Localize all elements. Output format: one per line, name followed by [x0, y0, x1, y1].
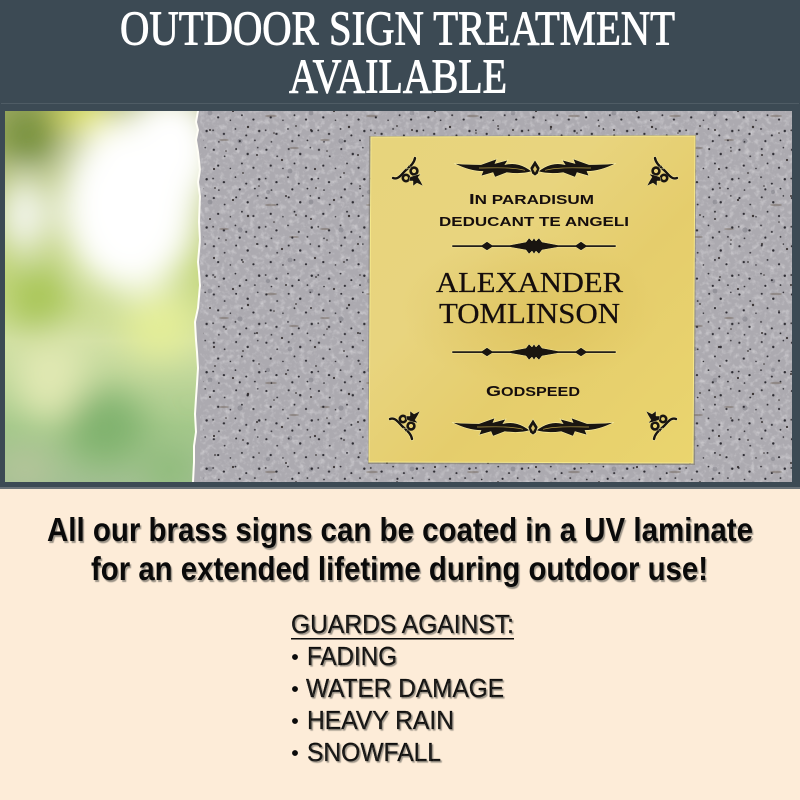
ornament: top flourish [454, 159, 616, 177]
stone wall [192, 111, 800, 482]
plaque verse text: IN PARADISUM [469, 191, 594, 208]
title: OUTDOOR SIGN TREATMENT [120, 0, 675, 56]
ornament: corner bottom right [646, 411, 676, 439]
guards against list [291, 611, 514, 767]
list item: heavy rain: HEAVY RAIN [307, 707, 454, 735]
ornament: upper divider [452, 238, 616, 254]
plaque plate [368, 135, 696, 465]
plaque name text [436, 268, 623, 330]
list heading: GUARDS AGAINST: [291, 611, 514, 639]
plaque name text: TOMLINSON [439, 299, 620, 330]
ornament: bottom flourish [452, 418, 614, 436]
list item: water damage: WATER DAMAGE [306, 675, 504, 703]
ornament: corner bottom left [390, 411, 420, 439]
list item: fading: FADING [307, 643, 397, 671]
title: AVAILABLE [289, 48, 507, 104]
plaque name text: ALEXANDER [436, 268, 623, 299]
ornament: corner top right [647, 158, 677, 186]
ornament: lower divider [452, 344, 616, 360]
blurred green foliage background [0, 90, 220, 494]
plaque verse text [439, 191, 629, 229]
photo: brass plaque on stone [5, 111, 792, 482]
lower panel message: for an extended lifetime during outdoor use! [91, 550, 708, 587]
brass plaque [368, 135, 696, 465]
plaque verse text: DEDUCANT TE ANGELI [439, 215, 629, 229]
header banner [0, 0, 800, 489]
list item: snowfall: SNOWFALL [307, 739, 441, 767]
lower panel message [47, 511, 753, 587]
plaque closing text: G ODSPEED [486, 383, 580, 400]
ornament: corner top left [393, 158, 423, 186]
title [120, 0, 675, 104]
